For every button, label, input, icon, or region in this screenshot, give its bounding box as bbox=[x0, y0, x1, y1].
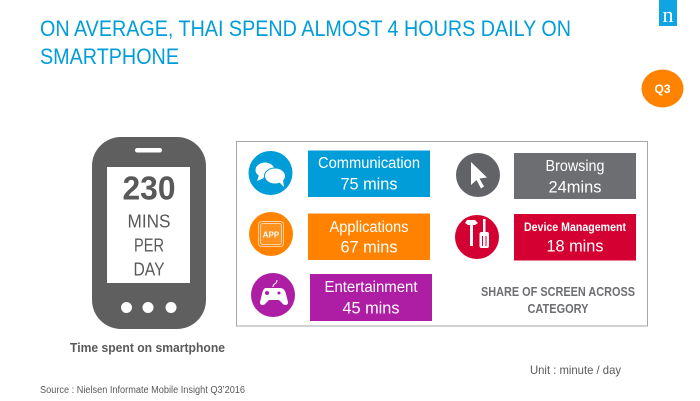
box: applications bbox=[308, 214, 430, 260]
icon: device management tools bbox=[455, 215, 499, 259]
icon: communication speech bubbles bbox=[248, 151, 292, 195]
box: device management: Device Management bbox=[524, 222, 626, 234]
box: applications: 67 mins bbox=[340, 238, 398, 256]
title: ON AVERAGE, THAI SPEND ALMOST 4 HOURS DAILY ON bbox=[40, 16, 571, 41]
box: entertainment: Entertainment bbox=[324, 279, 418, 296]
box: entertainment: 45 mins bbox=[342, 298, 400, 318]
box: entertainment bbox=[310, 274, 432, 321]
box: communication: Communication bbox=[318, 155, 420, 172]
phone caption: Time spent on smartphone bbox=[70, 340, 225, 355]
badge: Q3 bbox=[642, 70, 684, 108]
box: device management: 18 mins bbox=[546, 236, 604, 256]
logo: nielsen bbox=[659, 0, 677, 27]
box: communication: 75 mins bbox=[340, 174, 398, 194]
panel caption: CATEGORY bbox=[528, 302, 589, 316]
title: SMARTPHONE bbox=[40, 44, 179, 69]
badge: Q3: Q3 bbox=[654, 82, 671, 96]
source note: Source : Nielsen Informate Mobile Insight Q3’2016 bbox=[40, 385, 245, 396]
icon: smartphone with daily total: MINS bbox=[128, 210, 170, 232]
icon: browsing cursor bbox=[456, 153, 500, 197]
icon: applications: APP bbox=[263, 230, 280, 240]
box: browsing: 24mins bbox=[548, 178, 602, 196]
box: device management bbox=[514, 214, 636, 260]
icon: smartphone with daily total: 230 bbox=[122, 170, 176, 206]
panel: share of screen by category bbox=[236, 142, 648, 326]
icon: smartphone with daily total: DAY bbox=[134, 258, 164, 280]
panel caption: SHARE OF SCREEN ACROSS bbox=[481, 285, 635, 299]
icon: entertainment game controller bbox=[251, 273, 295, 317]
icon: smartphone with daily total: PER bbox=[134, 234, 164, 256]
unit note: Unit : minute / day bbox=[530, 363, 621, 377]
title bbox=[40, 16, 571, 69]
panel caption bbox=[481, 285, 635, 316]
logo: nielsen: n bbox=[662, 2, 674, 27]
box: browsing bbox=[514, 153, 636, 199]
box: communication bbox=[308, 150, 430, 197]
box: browsing: Browsing bbox=[546, 158, 604, 175]
icon: smartphone with daily total bbox=[92, 137, 206, 329]
box: applications: Applications bbox=[330, 219, 409, 236]
icon: applications bbox=[249, 212, 293, 256]
